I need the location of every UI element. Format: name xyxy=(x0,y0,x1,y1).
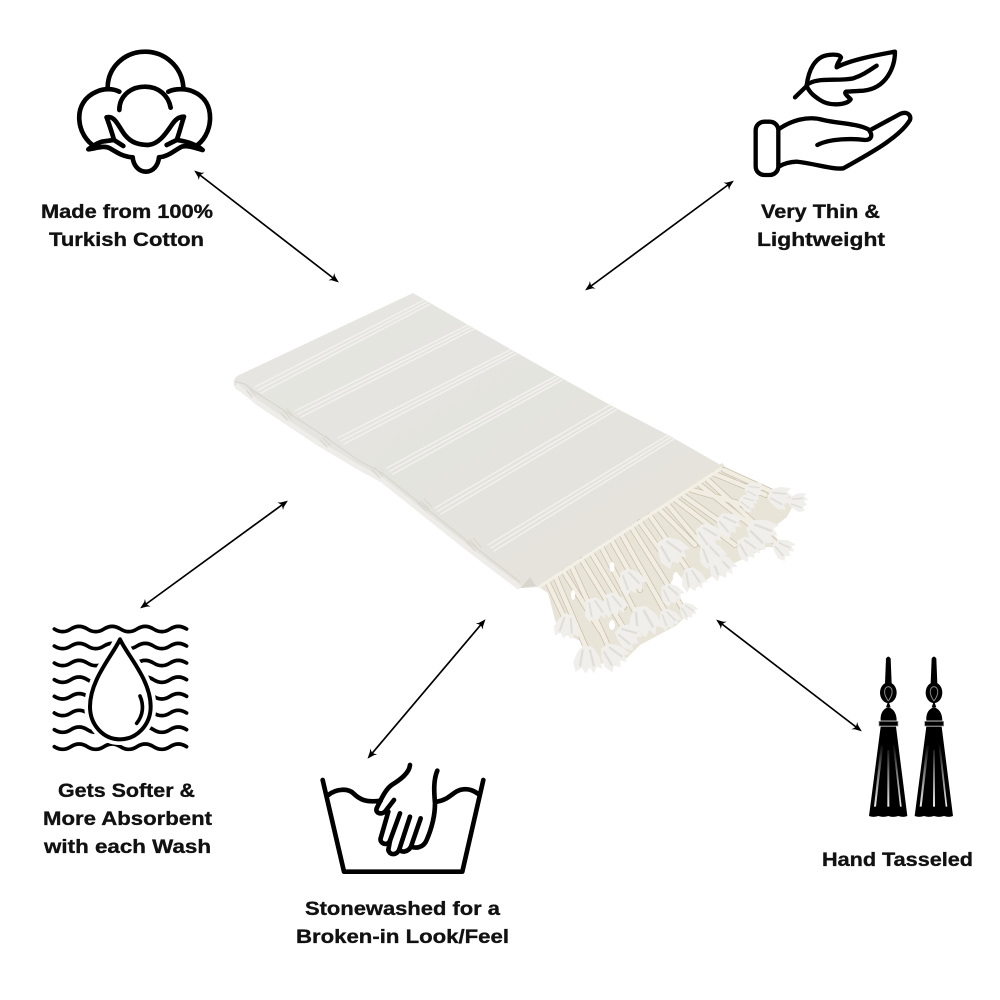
arrow: cotton to towel xyxy=(196,172,337,281)
heading: Gets Softer & More Absorbent with each Wash: with each Wash xyxy=(43,836,211,858)
tassel tufts xyxy=(552,478,809,675)
heading: Gets Softer & More Absorbent with each Wash xyxy=(43,780,213,858)
heading: Very Thin & Lightweight xyxy=(757,201,886,251)
twisted cords xyxy=(548,470,790,650)
heading: Gets Softer & More Absorbent with each Wash: Gets Softer & xyxy=(58,780,195,802)
heading: Very Thin & Lightweight: Very Thin & xyxy=(761,201,880,223)
heading: Stonewashed for a Broken-in Look/Feel: Broken-in Look/Feel xyxy=(296,926,509,948)
arrow: lightweight to towel xyxy=(587,182,732,289)
icon: cotton boll xyxy=(79,52,210,172)
heading: Stonewashed for a Broken-in Look/Feel xyxy=(296,898,509,948)
icon: pair of tassels xyxy=(869,657,953,817)
towel fold highlight xyxy=(236,385,520,588)
arrow: towel to absorbent xyxy=(142,502,286,607)
arrow: towel to stonewashed xyxy=(369,621,484,757)
towel photo illustration xyxy=(234,293,809,675)
fringe base xyxy=(539,463,795,665)
icon: hand in wash basin xyxy=(323,765,483,872)
heading: Hand Tasseled: Hand Tasseled xyxy=(822,849,973,871)
icon: leaf over open hand xyxy=(756,52,910,175)
icon: left tassel xyxy=(869,657,907,817)
heading: Gets Softer & More Absorbent with each Wash: More Absorbent xyxy=(43,808,213,830)
heading: Made from 100% Turkish Cotton: Made from 100% xyxy=(41,201,213,223)
icon: right tassel xyxy=(915,657,953,817)
heading: Made from 100% Turkish Cotton: Turkish Cotton xyxy=(49,229,204,251)
stripe ends on fold xyxy=(247,389,481,551)
hem edge xyxy=(539,468,722,587)
heading: Made from 100% Turkish Cotton xyxy=(41,201,213,251)
towel body xyxy=(234,293,724,588)
towel stripes xyxy=(247,300,674,551)
heading: Very Thin & Lightweight: Lightweight xyxy=(757,229,886,251)
towel corner flap xyxy=(521,577,536,588)
icon: water drop and waves xyxy=(54,626,187,749)
fold crease xyxy=(235,382,520,582)
gaps between cords xyxy=(571,562,679,630)
heading: Stonewashed for a Broken-in Look/Feel: Stonewashed for a xyxy=(305,898,500,920)
arrow: tassels to hand tasseled xyxy=(718,621,860,730)
